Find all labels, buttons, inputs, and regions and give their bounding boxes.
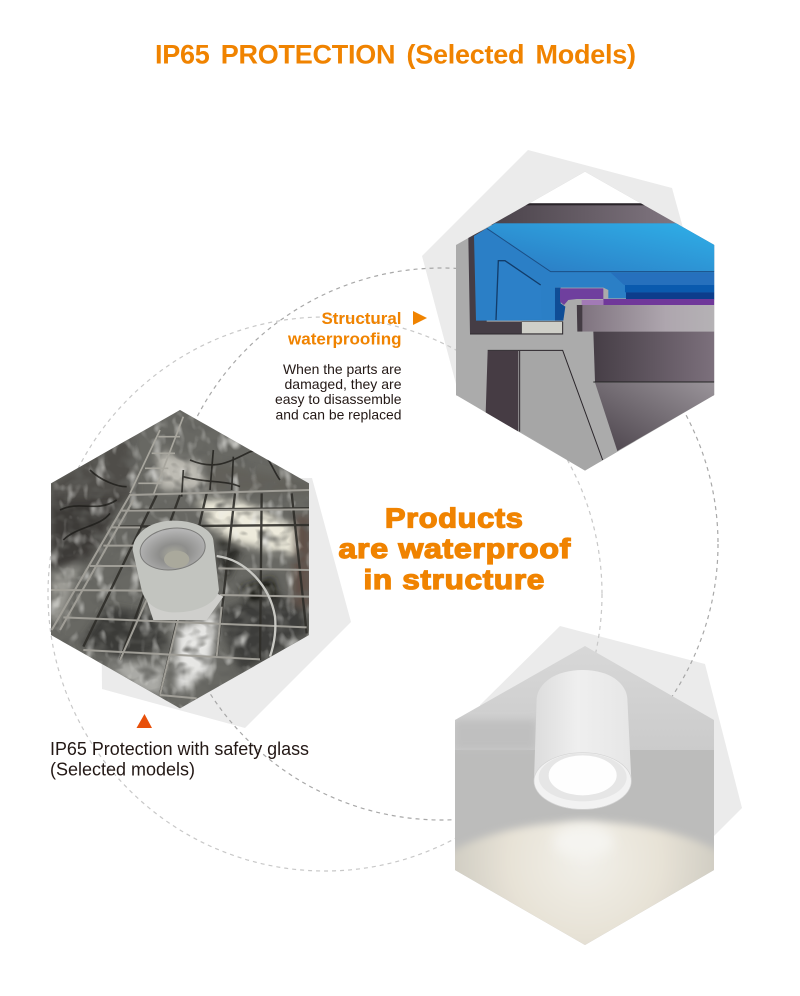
callout body text: and can be replaced (276, 406, 402, 422)
caption: IP65 protection: (Selected models) (50, 760, 195, 780)
upper rack ladder (130, 417, 183, 495)
hexagon photo: IP65 test rack with lamp (47, 407, 313, 713)
dashed orbit circle: large (166, 268, 718, 820)
grey backdrop shape: structural photo (422, 150, 714, 396)
foil texture (47, 407, 313, 713)
caption: IP65 protection: IP65 Protection with safety glass (50, 739, 309, 759)
lamp cylinder (534, 670, 631, 780)
grey backdrop shape: product photo (480, 626, 742, 870)
dashed orbit circle: left (48, 317, 602, 871)
central headline (338, 502, 571, 595)
lamp lens (549, 755, 617, 795)
photo tones (51, 433, 310, 700)
wire grid (83, 493, 309, 695)
central headline: in structure (364, 564, 545, 595)
callout heading: waterproofing (287, 330, 402, 348)
callout body text: damaged, they are (284, 376, 402, 392)
central headline: Products (385, 502, 524, 534)
hexagon photo: structural waterproofing cross-section (453, 170, 720, 473)
callout heading: Structural (322, 309, 402, 328)
arrow: points to structural photo (413, 311, 427, 325)
callout body text: When the parts are (283, 361, 402, 377)
arrow: points up to test photo (136, 714, 152, 728)
lamp rim (534, 753, 631, 809)
mesh under lamp (147, 594, 224, 620)
caption: IP65 protection (50, 739, 309, 780)
callout body text (275, 361, 402, 422)
lamp body (133, 521, 219, 612)
title: IP65 PROTECTION (Selected Models) (155, 40, 636, 70)
grey backdrop shape: test photo (100, 478, 351, 728)
central headline: are waterproof (338, 533, 571, 564)
lamp reflector (140, 528, 206, 570)
foil highlights (47, 407, 313, 713)
callout heading (287, 309, 402, 348)
wall light pool (455, 818, 714, 945)
callout: structural waterproofing (275, 309, 427, 422)
hexagon photo: ceiling mounted downlight (455, 646, 714, 945)
callout body text: easy to disassemble (275, 391, 402, 407)
